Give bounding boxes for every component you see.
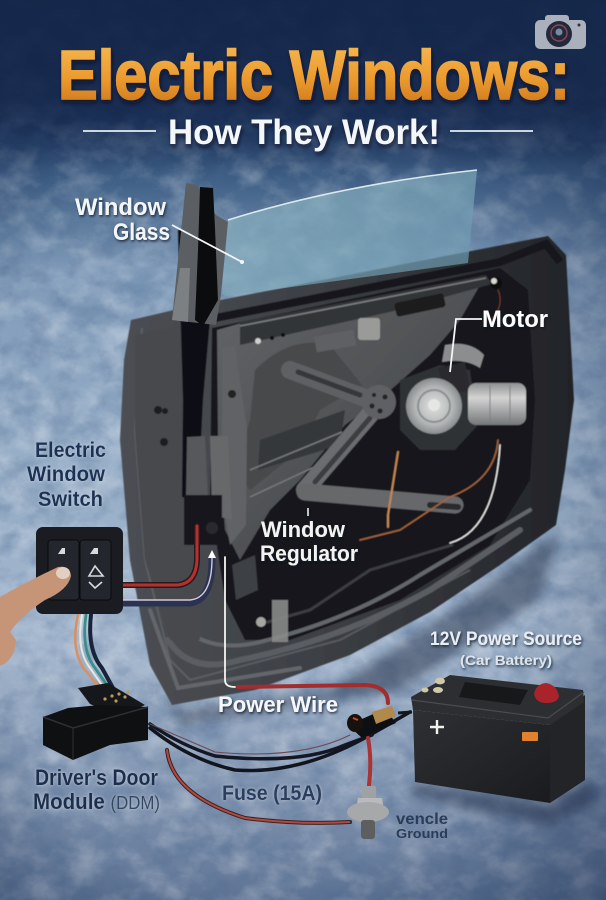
orange indicator bbox=[522, 732, 538, 741]
label: driver's door module bbox=[33, 765, 160, 814]
battery shadow bbox=[410, 780, 600, 825]
car door bbox=[120, 230, 574, 725]
car battery bbox=[410, 675, 600, 825]
shell inner rim bbox=[135, 328, 470, 680]
label: power source: (Car Battery) bbox=[460, 652, 552, 668]
door shell bbox=[120, 236, 574, 705]
system wiring bbox=[150, 712, 410, 823]
lower sill ribs bbox=[150, 510, 530, 688]
leader: window glass bbox=[172, 225, 244, 264]
label: window glass bbox=[75, 194, 170, 246]
label: motor bbox=[450, 306, 548, 372]
black pillar band bbox=[178, 230, 220, 500]
label: motor: Motor bbox=[482, 306, 548, 333]
label: window regulator: Window bbox=[261, 517, 346, 542]
label: electric window switch: Electric bbox=[35, 439, 106, 462]
red terminal cap bbox=[534, 683, 559, 703]
label: window glass: Glass bbox=[113, 219, 170, 246]
label: driver's door module: Driver's Door bbox=[35, 765, 158, 790]
power wire bbox=[225, 557, 388, 703]
vehicle ground bolt bbox=[347, 786, 389, 839]
internal wires bbox=[268, 290, 500, 622]
label: electric window switch: Switch bbox=[38, 488, 103, 511]
label: window regulator bbox=[260, 508, 358, 566]
finger bbox=[0, 567, 71, 666]
lower door details bbox=[256, 617, 266, 627]
label: fuse: Fuse (15A) bbox=[222, 782, 322, 805]
gray panel bbox=[217, 285, 480, 560]
label: vehicle ground bbox=[396, 811, 448, 841]
driver's door module bbox=[43, 683, 148, 760]
label: power source: 12V Power Source bbox=[430, 629, 582, 650]
switch recess bbox=[184, 495, 222, 545]
top rail bbox=[240, 275, 492, 345]
label: electric window switch: Window bbox=[27, 463, 106, 486]
label: electric window switch bbox=[27, 439, 106, 511]
fuse bbox=[347, 706, 412, 738]
electric window switch bbox=[0, 527, 123, 666]
battery body bbox=[413, 710, 550, 803]
left door skin bbox=[135, 325, 200, 640]
plus mark bbox=[430, 720, 444, 734]
dark inner cavity bbox=[210, 268, 535, 640]
label: vehicle ground: Ground bbox=[396, 826, 448, 841]
switch wiring bbox=[75, 526, 212, 688]
arrow tip: switch wire bbox=[208, 550, 216, 558]
label: power wire: Power Wire bbox=[218, 692, 338, 717]
label: window regulator: Regulator bbox=[260, 541, 358, 566]
subtitle with rules: How They Work! bbox=[168, 113, 440, 152]
label: window glass: Window bbox=[75, 194, 166, 221]
terminals bbox=[422, 678, 445, 693]
door shadow bbox=[150, 530, 560, 725]
label: power source bbox=[430, 629, 582, 668]
camera watermark icon bbox=[535, 15, 586, 49]
vertical bracket bbox=[222, 346, 247, 545]
window regulator arms bbox=[290, 370, 458, 507]
label: vehicle ground: vencle bbox=[396, 811, 448, 828]
motor bbox=[400, 344, 526, 450]
label: driver's door module: Module (DDM) bbox=[33, 789, 160, 814]
window glass and pillar bbox=[172, 170, 477, 326]
